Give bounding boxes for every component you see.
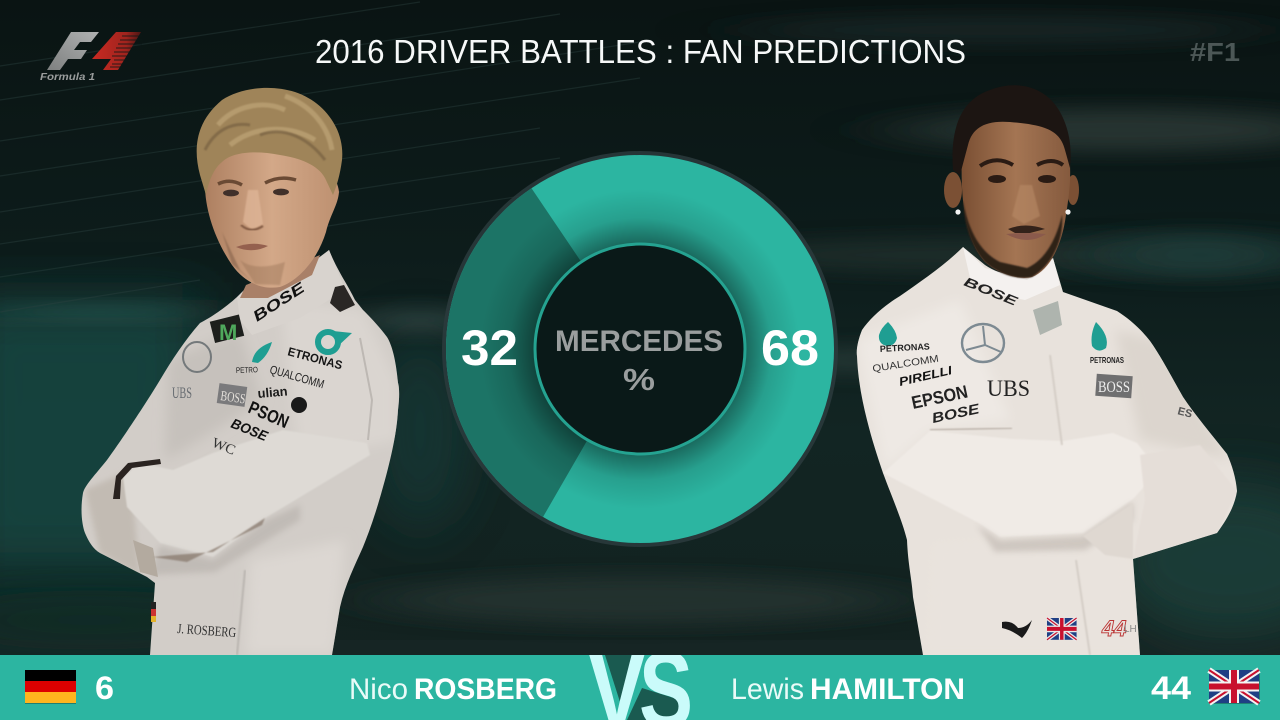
sponsor logos: Rosberg: BOSE	[229, 415, 271, 444]
sponsor logos: Rosberg: ulian	[257, 383, 288, 401]
segment: Rosberg 32	[446, 188, 587, 517]
head: Hamilton hair	[952, 85, 1071, 175]
VS emblem	[589, 655, 690, 720]
footer bar	[0, 655, 1280, 720]
neck and collar	[237, 250, 345, 335]
sponsor logos: Rosberg: UBS	[172, 385, 192, 402]
F1 logo	[40, 32, 142, 83]
centre label: percent: %	[623, 362, 655, 397]
facial features: Rosberg	[218, 178, 296, 285]
sponsor logos: Rosberg: QUALCOMM	[268, 362, 326, 391]
sponsor logos: Hamilton: EPSON	[910, 381, 970, 413]
ears	[944, 172, 962, 208]
donut chart: Mercedes fan prediction	[442, 151, 838, 547]
logo: F letter	[47, 32, 99, 70]
sponsor logos: Hamilton: QUALCOMM	[872, 354, 940, 375]
sponsor logos: Rosberg: ETRONAS	[286, 344, 344, 372]
sponsor logos: Rosberg: PETRO	[236, 365, 258, 375]
sponsor logos: Rosberg: M	[219, 320, 237, 345]
sponsor logos: Hamilton: LH	[1124, 624, 1137, 635]
label: 32: 32	[461, 320, 518, 376]
logo: red 1 with streaks	[92, 32, 142, 70]
suit: Rosberg	[70, 240, 410, 660]
sponsor logos: Hamilton: ES	[1176, 405, 1194, 421]
inner collar	[963, 247, 1060, 300]
facial features: Hamilton	[955, 160, 1071, 240]
centre disc	[535, 244, 745, 454]
sponsor logos: Hamilton: PETRONAS	[1090, 355, 1124, 365]
label: 68: 68	[761, 320, 819, 376]
flag: United Kingdom	[1209, 670, 1260, 704]
sponsor logos: Rosberg: WC	[210, 436, 237, 459]
centre label: MERCEDES: MERCEDES	[555, 325, 723, 358]
driver portrait: Nico Rosberg	[70, 88, 410, 660]
head: Rosberg hair	[197, 88, 342, 195]
head: Hamilton face	[962, 109, 1070, 278]
sponsor logos: Rosberg: BOSE	[250, 279, 309, 325]
name: Nico Rosberg: NicoROSBERG	[349, 673, 557, 706]
sponsor logos: Hamilton: 44	[1101, 616, 1126, 641]
suit: Hamilton	[850, 240, 1250, 660]
logo: Formula 1 wordmark: Formula 1	[40, 72, 95, 83]
sponsor logos: Hamilton: BOSE	[930, 400, 981, 426]
name: Lewis Hamilton: LewisHAMILTON	[731, 673, 965, 706]
outer halo ring	[442, 151, 838, 547]
sponsor logos: Hamilton: UBS	[987, 376, 1030, 401]
segment: Hamilton 68	[446, 155, 834, 543]
inner shadow	[480, 189, 800, 509]
sponsor logos: Rosberg: J. ROSBERG	[177, 622, 237, 641]
hashtag: #F1	[1190, 37, 1240, 67]
sponsor logos: Hamilton: BOSS	[1098, 379, 1130, 396]
sponsor logos: Rosberg: BOSS	[219, 389, 246, 407]
title: 2016 DRIVER BATTLES : FAN PREDICTIONS	[315, 33, 966, 70]
sponsor logos: Hamilton: PIRELLI	[898, 363, 954, 389]
driver portrait: Lewis Hamilton	[850, 85, 1250, 660]
head: Rosberg face	[205, 142, 339, 288]
sponsor logos: Rosberg: PSON	[245, 397, 292, 432]
flag: Germany	[25, 670, 76, 704]
number: Hamilton 44: 44	[1151, 670, 1191, 706]
sponsor logos: Hamilton	[872, 274, 1194, 641]
number: Rosberg 6: 6	[95, 670, 114, 706]
sponsor logos: Hamilton: BOSE	[962, 274, 1020, 309]
beard	[963, 200, 1062, 278]
sponsor logos: Rosberg	[151, 279, 355, 641]
sponsor logos: Hamilton: PETRONAS	[880, 341, 930, 354]
watch	[113, 459, 161, 499]
